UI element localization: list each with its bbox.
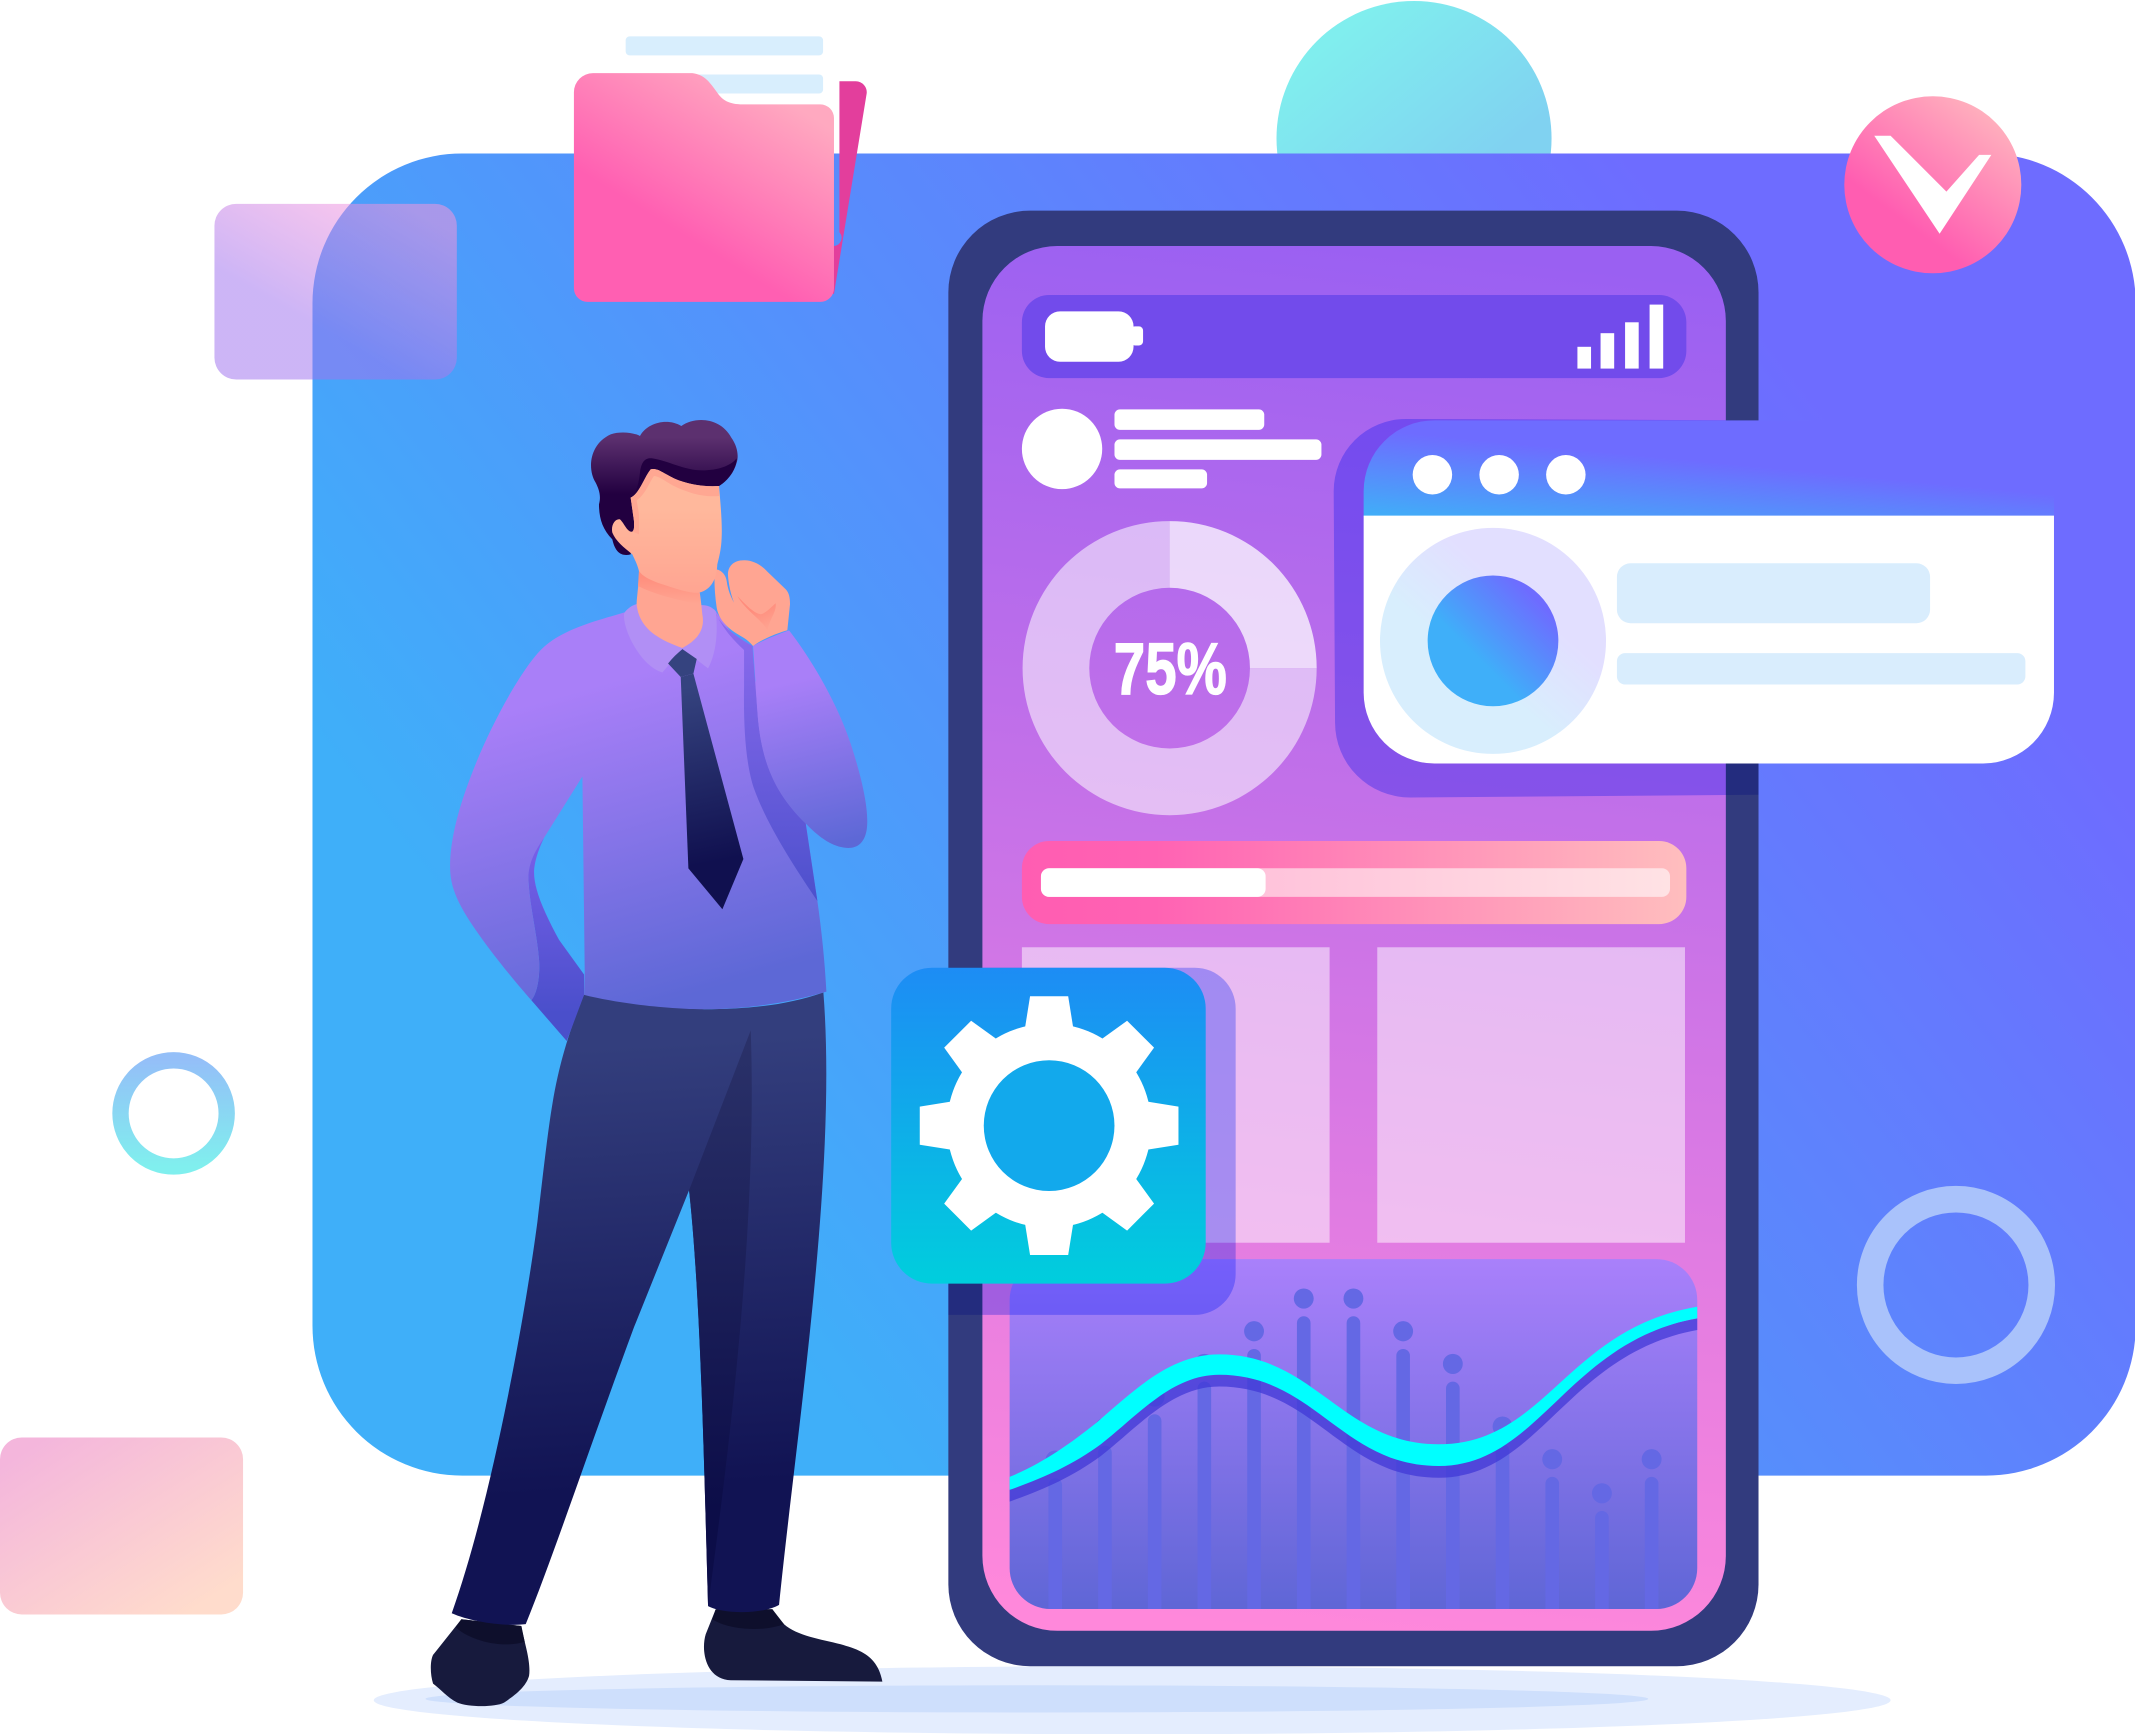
translucent card top left bbox=[214, 204, 457, 379]
tie bbox=[668, 649, 743, 909]
head bbox=[591, 420, 738, 593]
window body bbox=[1364, 516, 2054, 763]
ring right bbox=[1870, 1199, 2042, 1371]
hair bbox=[591, 420, 738, 555]
profile row bbox=[1022, 409, 1321, 489]
pink card bottom left bbox=[0, 1437, 243, 1614]
content tile left bbox=[1022, 947, 1330, 1243]
content tile right bbox=[1377, 947, 1685, 1243]
ground shadow bbox=[374, 1666, 1891, 1734]
percent label: 75% bbox=[1114, 627, 1227, 710]
forehead shade bbox=[631, 469, 719, 534]
gear tile shadow bbox=[948, 968, 1236, 1315]
gear icon bbox=[920, 996, 1178, 1255]
shirt torso and arm bbox=[450, 609, 826, 1009]
check badge bbox=[1844, 96, 2021, 273]
collar bbox=[624, 604, 717, 672]
right forearm bbox=[753, 630, 867, 848]
phone body bbox=[948, 211, 1759, 1666]
shirt and upper body bbox=[450, 604, 826, 1041]
line chart panel bbox=[1010, 1259, 1697, 1628]
shirt fold bbox=[713, 608, 817, 901]
man bbox=[431, 420, 882, 1706]
teal circle bbox=[1277, 1, 1552, 276]
window circle icon bbox=[1380, 528, 1606, 754]
hand bbox=[714, 560, 790, 646]
neck shadow bbox=[638, 571, 701, 604]
ring left bbox=[121, 1060, 227, 1166]
blue background panel bbox=[312, 153, 2135, 1476]
wave shadow bbox=[1010, 1318, 1697, 1502]
donut chart bbox=[1023, 521, 1317, 815]
face bbox=[612, 469, 722, 593]
bars and dots bbox=[1045, 1288, 1662, 1628]
phone bbox=[899, 211, 1759, 1666]
trousers shading bbox=[689, 1030, 752, 1606]
window content bars bbox=[1617, 563, 2025, 684]
folder icon bbox=[574, 36, 867, 302]
left and right shoes bbox=[431, 1609, 882, 1706]
window header bbox=[1364, 420, 2054, 517]
inner sleeve bbox=[521, 838, 584, 1041]
hair fringe bbox=[631, 458, 737, 498]
window shadow bbox=[1334, 419, 1759, 797]
trousers bbox=[452, 992, 826, 1625]
wave line bbox=[1010, 1307, 1697, 1490]
progress bar bbox=[1022, 841, 1686, 924]
phone screen bbox=[982, 246, 1726, 1631]
gear tile bbox=[891, 968, 1206, 1284]
window dots bbox=[1413, 455, 1586, 495]
neck bbox=[637, 571, 703, 648]
browser window bbox=[1364, 420, 2054, 763]
status bar bbox=[1022, 295, 1686, 378]
